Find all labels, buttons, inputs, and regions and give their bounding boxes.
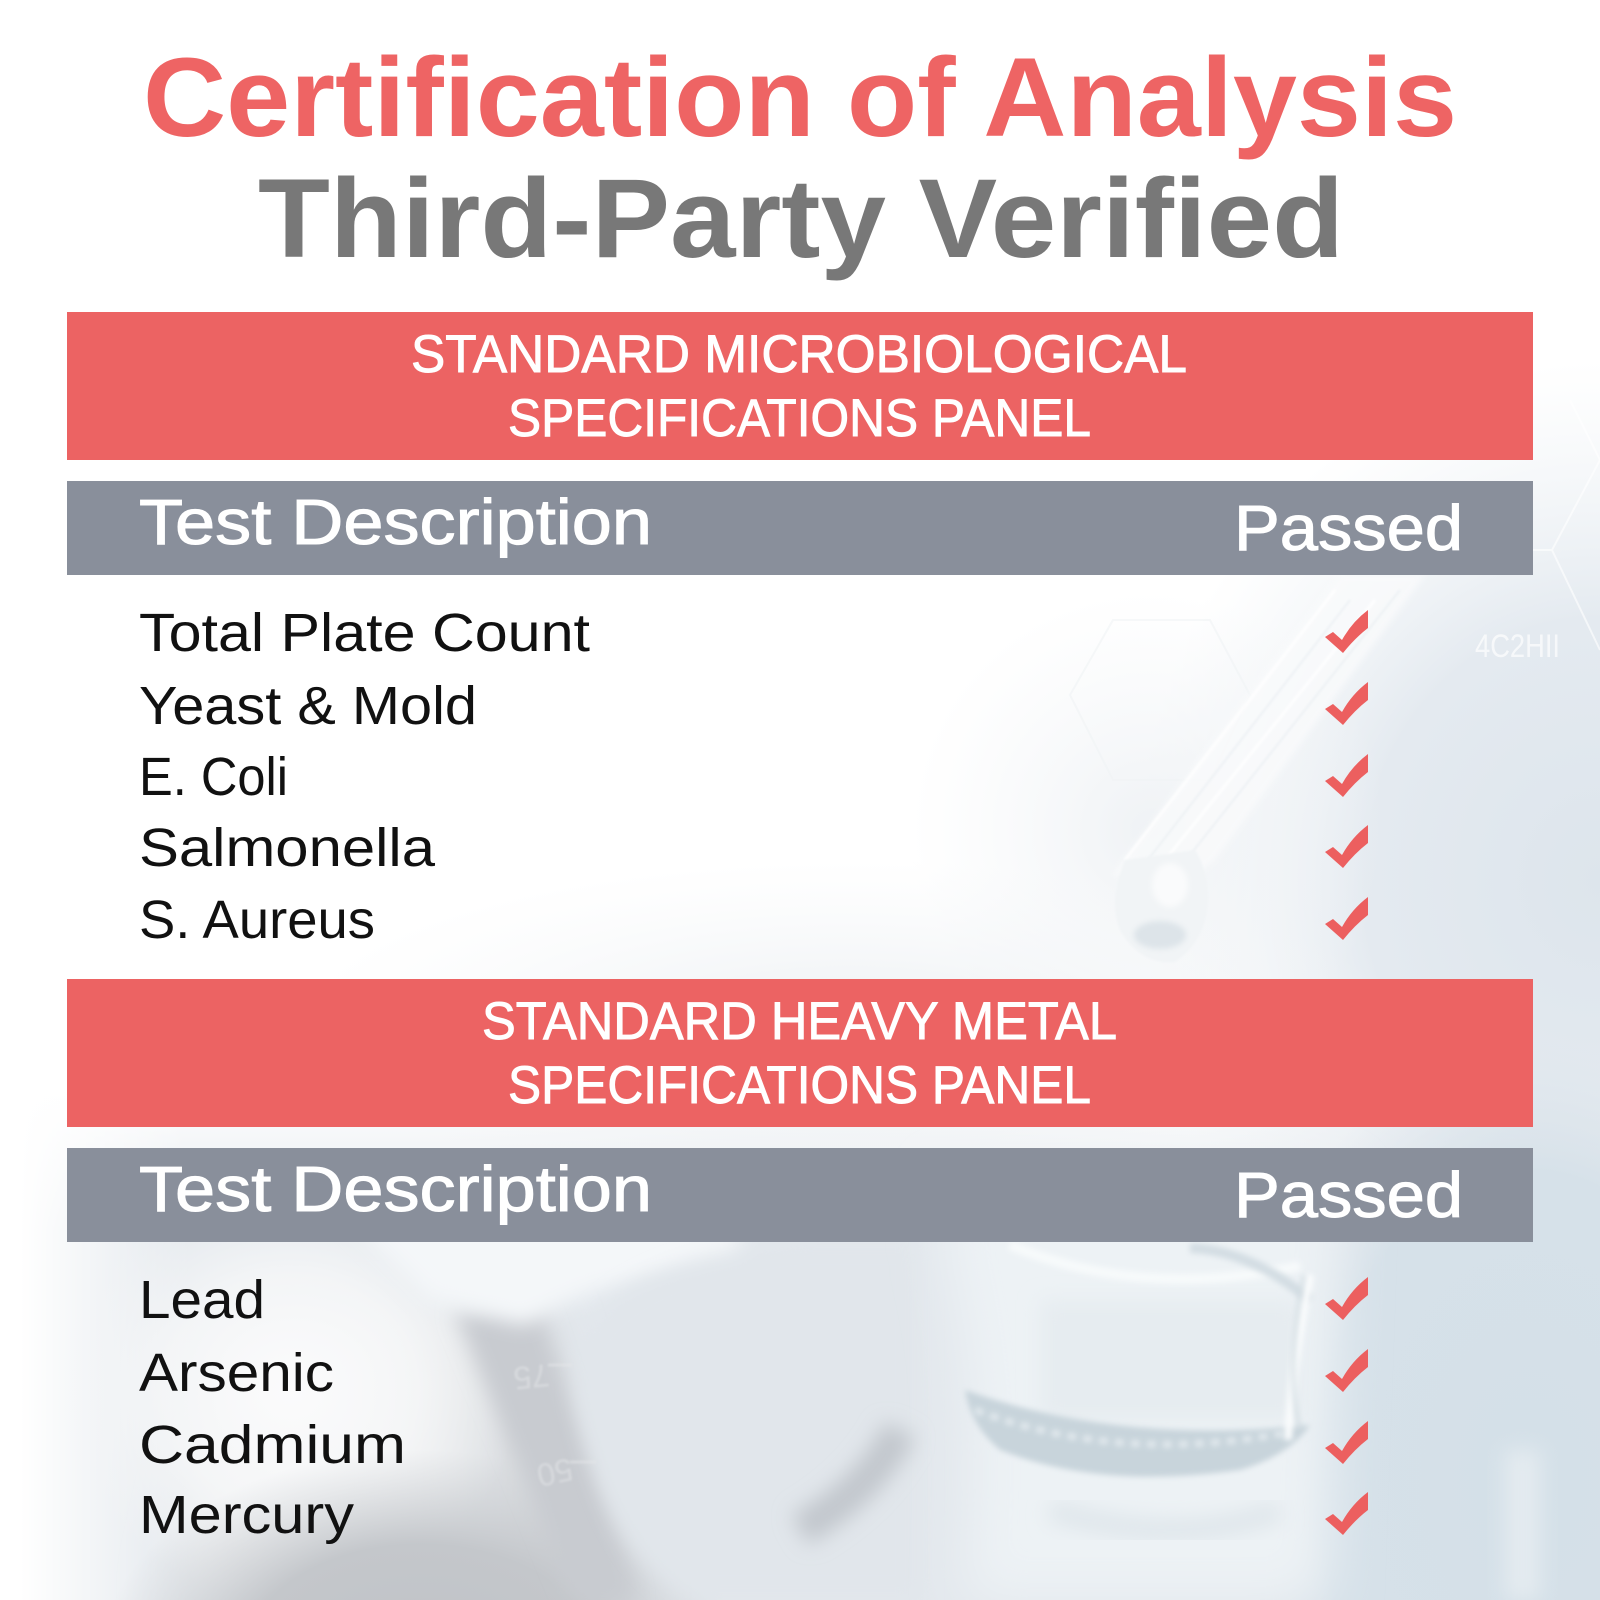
banner: heavy metal: STANDARD HEAVY METAL xyxy=(482,992,1117,1051)
beaker scale marks xyxy=(512,1357,596,1494)
glass jar with water on the right xyxy=(945,1180,1340,1600)
table header: microbiological: Passed xyxy=(1234,492,1463,564)
panel: microbiological specifications xyxy=(67,312,1533,950)
banner: microbiological: STANDARD MICROBIOLOGICAL xyxy=(411,325,1187,384)
right background tube xyxy=(1505,1450,1540,1600)
title line 2: Third-Party Verified xyxy=(258,156,1344,281)
panel: heavy metal specifications xyxy=(67,979,1533,1545)
test list: microbiological: Total Plate Count xyxy=(139,603,590,663)
test list: microbiological xyxy=(139,603,590,950)
pass checkmarks: microbiological xyxy=(1325,610,1368,940)
test list: heavy metal: Cadmium xyxy=(139,1415,406,1475)
test list: heavy metal: Lead xyxy=(139,1270,265,1330)
glass dropper xyxy=(1112,575,1425,962)
table header: heavy metal: Test Description xyxy=(139,1153,652,1225)
hexagon molecule outlines xyxy=(1070,400,1600,780)
beaker scale marks: 75 xyxy=(512,1357,551,1397)
table header: heavy metal xyxy=(67,1148,1533,1242)
test list: microbiological: S. Aureus xyxy=(139,890,375,950)
formula watermark: 4C2HII xyxy=(1475,628,1560,664)
banner: heavy metal xyxy=(67,979,1533,1127)
test list: heavy metal: Mercury xyxy=(139,1485,354,1545)
test list: microbiological: Yeast & Mold xyxy=(139,676,477,736)
banner: microbiological: SPECIFICATIONS PANEL xyxy=(508,389,1091,448)
title line 1: Certification of Analysis xyxy=(143,35,1457,160)
pass checkmarks: heavy metal xyxy=(1325,1277,1368,1535)
table header: heavy metal: Passed xyxy=(1234,1159,1463,1231)
beaker scale marks: 50 xyxy=(534,1451,576,1494)
test list: heavy metal xyxy=(139,1270,406,1545)
test list: heavy metal: Arsenic xyxy=(139,1343,334,1403)
test list: microbiological: Salmonella xyxy=(139,818,436,878)
banner: microbiological xyxy=(67,312,1533,460)
beaker on the left xyxy=(60,1180,920,1600)
table header: microbiological xyxy=(67,481,1533,575)
title xyxy=(143,35,1457,281)
test list: microbiological: E. Coli xyxy=(139,747,288,807)
banner: heavy metal: SPECIFICATIONS PANEL xyxy=(508,1056,1091,1115)
table header: microbiological: Test Description xyxy=(139,486,652,558)
